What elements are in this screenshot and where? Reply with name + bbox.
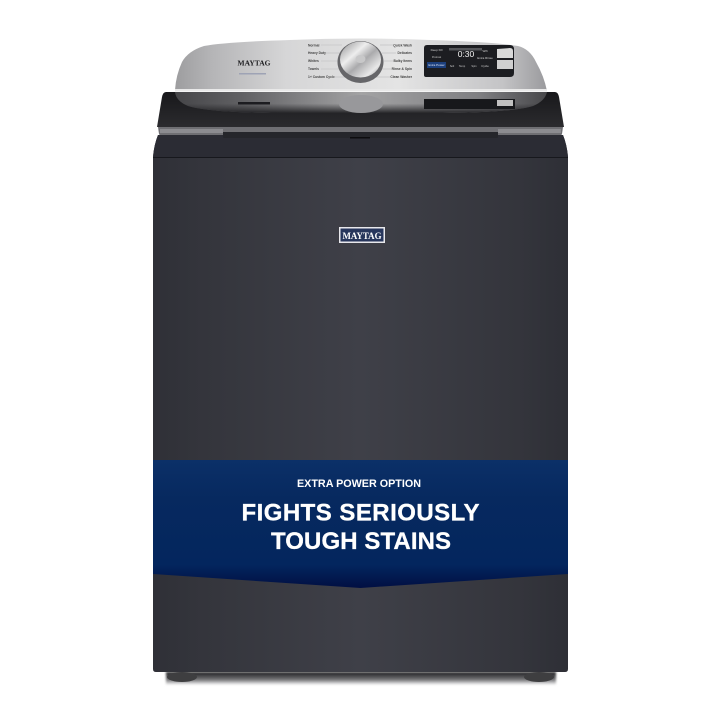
button: remove stains: Pretreat: [432, 55, 441, 59]
right buttons: Wifi: [482, 49, 488, 53]
screen: cycle time: 0:30: [458, 49, 475, 59]
icon: right foot: [524, 672, 554, 682]
front logo badge: [339, 227, 385, 243]
reflected display: [424, 99, 515, 109]
right cycle labels: Bulky Items: [393, 59, 412, 63]
floor shadow: [166, 672, 556, 685]
right cycle labels: Delicates: [398, 51, 412, 55]
right cycle labels: Quick Wash: [393, 44, 412, 48]
stainless control panel: [175, 38, 547, 92]
control panel reflection: [175, 92, 547, 113]
right cycle labels: Rinse & Spin: [392, 67, 412, 71]
right cycle labels: [390, 44, 413, 79]
left cycle labels: Whites: [308, 59, 319, 63]
front logo badge: MAYTAG: [342, 232, 382, 242]
reflected logo: [238, 102, 270, 104]
label leader lines: [321, 45, 396, 77]
display panel: [424, 45, 514, 77]
left cycle labels: Normal: [308, 44, 319, 48]
right buttons: Extra Rinse: [477, 56, 493, 60]
small blue caption: [239, 73, 266, 74]
start and power buttons: [497, 48, 513, 58]
left cycle labels: 1ˢᵗ Custom Cycle: [308, 75, 335, 79]
right buttons: Cycle: [481, 64, 489, 68]
screen: option buttons: [450, 64, 477, 68]
washer body: [153, 135, 568, 672]
right cycle labels: Clean Washer: [390, 75, 413, 79]
left cycle labels: [308, 44, 335, 79]
right buttons: [477, 49, 493, 68]
logo: Maytag: MAYTAG: [238, 58, 271, 68]
lid trim: [158, 127, 563, 138]
screen: option buttons: Spin: [471, 64, 477, 68]
icon: reflected dial: [339, 95, 383, 113]
left cycle labels: Towels: [308, 67, 319, 71]
banner eyebrow: EXTRA POWER OPTION: [297, 478, 421, 490]
icon: dial: [338, 41, 384, 83]
banner headline: FIGHTS SERIOUSLY: [242, 500, 480, 526]
button: deep fill: Deep Fill: [431, 48, 443, 52]
left cycle labels: Heavy Duty: [308, 51, 326, 55]
screen: option buttons: Soil: [450, 64, 455, 68]
button: extra power: [427, 62, 446, 68]
banner: [153, 460, 568, 588]
icon: left foot: [167, 672, 197, 682]
screen: option buttons: Temp: [459, 64, 466, 68]
banner headline: TOUGH STAINS: [271, 528, 451, 555]
banner headline: [242, 500, 480, 555]
black lid: [157, 92, 564, 127]
display panel: Extra Power: [428, 63, 445, 67]
